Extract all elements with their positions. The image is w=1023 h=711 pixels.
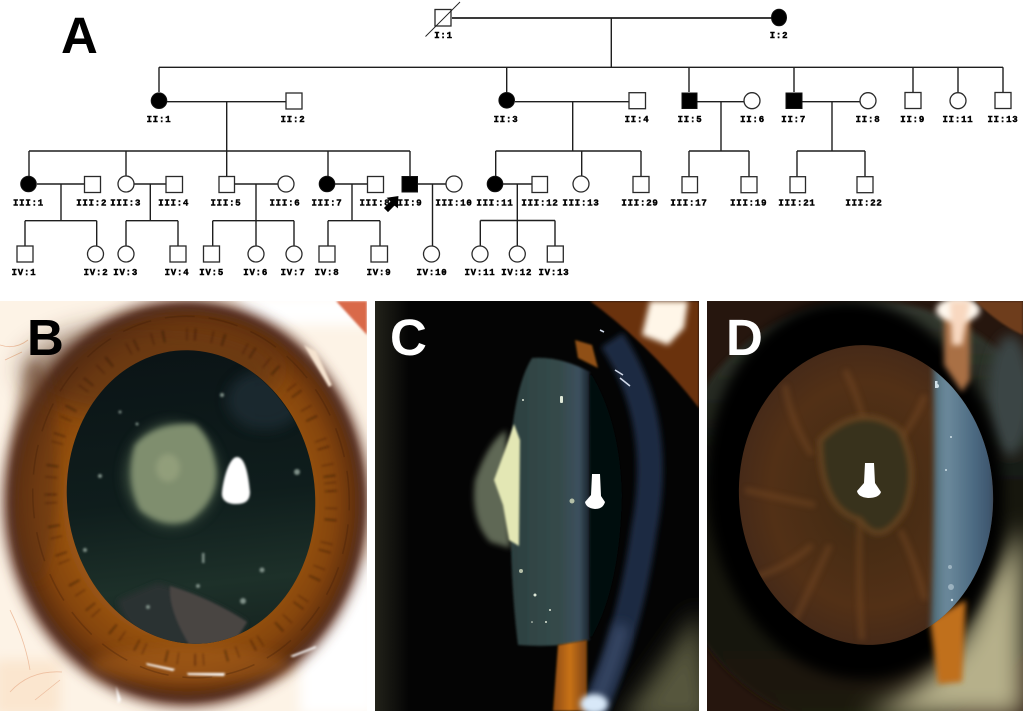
lens disc <box>729 337 1003 653</box>
panel: eye photograph B <box>0 295 375 711</box>
upper right lens reflection <box>226 372 294 431</box>
white reflections on the sclera <box>0 295 375 711</box>
individual I:2 affected <box>770 9 788 41</box>
sclera blood vessels <box>0 340 62 700</box>
individual II:4: II:4 <box>625 115 649 125</box>
beam specks <box>935 381 954 601</box>
individual III:17 <box>670 177 708 208</box>
iris lower warm tone <box>90 647 290 683</box>
individual IV:8 <box>315 246 339 278</box>
upper orange iris reflection <box>575 340 598 368</box>
individual II:5 affected: II:5 <box>678 115 702 125</box>
individual III:8 <box>359 176 391 208</box>
dark gap behind beam <box>590 372 622 640</box>
pupil <box>66 350 316 644</box>
individual IV:3: IV:3 <box>113 268 138 278</box>
iris radial streaks <box>44 328 337 666</box>
bright lens opacity <box>494 424 520 546</box>
lower orange iris reflection <box>553 640 587 711</box>
retroillumination spokes <box>745 370 925 640</box>
individual III:12: III:12 <box>521 198 559 208</box>
corneal highlight <box>585 474 605 509</box>
individual III:5 <box>210 176 242 208</box>
individual IV:13: IV:13 <box>538 268 570 278</box>
individual IV:7 <box>281 246 305 278</box>
individual I:1 deceased: I:1 <box>434 31 453 41</box>
individual IV:7: IV:7 <box>281 268 305 278</box>
dark background <box>409 301 699 711</box>
individual III:10: III:10 <box>435 198 473 208</box>
individual IV:3 <box>113 246 138 278</box>
blue corneal arc <box>594 340 650 711</box>
individual IV:11: IV:11 <box>464 268 496 278</box>
individual III:9 affected proband <box>391 176 423 208</box>
individual II:11: II:11 <box>942 115 974 125</box>
individual III:11 affected <box>476 176 514 208</box>
individual II:3 affected <box>494 92 518 125</box>
individual III:10 <box>435 176 473 208</box>
individual IV:2 <box>84 246 108 278</box>
individual IV:9: IV:9 <box>367 268 391 278</box>
individual II:1 affected: II:1 <box>147 115 171 125</box>
white flecks <box>83 393 300 609</box>
individual IV:1 <box>12 246 36 278</box>
individual III:11 affected: III:11 <box>476 198 514 208</box>
individual IV:1: IV:1 <box>12 268 36 278</box>
individual III:4: III:4 <box>158 198 189 208</box>
individual II:7 affected: II:7 <box>781 115 806 125</box>
individual II:8: II:8 <box>856 115 880 125</box>
individual IV:12 <box>501 246 532 278</box>
panel letter C: C <box>390 309 427 366</box>
individual III:4 <box>158 176 189 208</box>
individual II:6: II:6 <box>740 115 765 125</box>
lower blue flare <box>580 694 608 711</box>
grey limbal ring <box>664 301 1023 711</box>
individual III:9 affected proband: III:9 <box>391 198 423 208</box>
iris <box>10 305 364 701</box>
iris specular reflections <box>116 345 332 704</box>
individual II:13 <box>987 92 1019 125</box>
individual IV:10 <box>416 246 448 278</box>
individual III:2: III:2 <box>76 198 107 208</box>
individual II:6 <box>740 93 765 125</box>
iris left shadow <box>13 360 57 580</box>
individual III:29 <box>621 176 659 208</box>
sclera corner: eyelid <box>336 301 367 335</box>
central ring <box>820 417 911 533</box>
individual II:9 <box>900 92 925 125</box>
individual II:7 affected <box>781 93 806 125</box>
individual III:6 <box>269 176 301 208</box>
upper right grey tone <box>988 335 1023 455</box>
dark brown corner background <box>707 301 1023 711</box>
lens slit beam <box>510 358 591 646</box>
pedigree connector lines <box>25 18 1003 246</box>
individual II:8 <box>856 93 880 125</box>
opacity core <box>156 454 180 482</box>
individual IV:4 <box>165 246 189 278</box>
corneal highlight <box>857 463 881 498</box>
individual II:3 affected: II:3 <box>494 115 518 125</box>
arrow: proband indicator <box>384 196 398 212</box>
individual III:1 affected: III:1 <box>13 198 44 208</box>
generation II <box>147 92 1019 125</box>
individual II:4 <box>625 93 649 125</box>
individual III:19 <box>730 177 767 208</box>
eyelid top right <box>975 301 1023 335</box>
individual IV:2: IV:2 <box>84 268 108 278</box>
individual III:7 affected: III:7 <box>311 198 343 208</box>
individual II:9: II:9 <box>900 115 925 125</box>
individual III:7 affected <box>311 176 343 208</box>
individual IV:11 <box>464 246 496 278</box>
individual IV:13 <box>538 246 570 278</box>
central lens opacity <box>131 424 216 523</box>
beam flare at limbus <box>936 298 980 322</box>
individual III:13 <box>562 176 600 208</box>
individual IV:9 <box>367 246 391 278</box>
central lens opacity halo <box>125 423 219 527</box>
sclera background <box>0 301 367 711</box>
individual II:5 affected <box>678 93 702 125</box>
individual III:2 <box>76 176 107 208</box>
individual IV:10: IV:10 <box>416 268 448 278</box>
generation III <box>13 176 883 208</box>
individual III:13: III:13 <box>562 198 600 208</box>
individual IV:8: IV:8 <box>315 268 339 278</box>
lower right pale sclera <box>860 525 1023 711</box>
individual III:29: III:29 <box>621 198 659 208</box>
eyelid light reflection <box>642 301 688 345</box>
individual III:8: III:8 <box>359 198 391 208</box>
iris halo <box>3 299 369 707</box>
individual III:22: III:22 <box>845 198 883 208</box>
pupil contents <box>83 370 303 646</box>
individual II:2 <box>281 93 305 125</box>
individual IV:5: IV:5 <box>199 268 224 278</box>
individual II:13: II:13 <box>987 115 1019 125</box>
individual III:17: III:17 <box>670 198 708 208</box>
generation I <box>426 2 788 41</box>
panel letter D: D <box>726 309 763 366</box>
individual III:22 <box>845 177 883 208</box>
dim left periphery <box>375 301 400 711</box>
individual IV:12: IV:12 <box>501 268 532 278</box>
lens opacity halo <box>474 430 510 548</box>
individual III:21: III:21 <box>778 198 816 208</box>
lower blue arc highlight <box>592 625 622 711</box>
individual II:2: II:2 <box>281 115 305 125</box>
individual II:1 affected <box>147 93 171 125</box>
white flecks <box>519 330 630 623</box>
individual III:19: III:19 <box>730 198 767 208</box>
individual III:21 <box>778 177 816 208</box>
panel: pedigree A <box>12 2 1019 278</box>
individual I:1 deceased <box>426 2 460 41</box>
pigmented crescent <box>120 584 234 644</box>
lower orange beam <box>930 600 966 684</box>
corneal highlight <box>222 457 250 504</box>
individual I:2 affected: I:2 <box>770 31 788 41</box>
individual III:6: III:6 <box>269 198 301 208</box>
generation IV <box>12 246 570 278</box>
individual III:3 <box>110 176 141 208</box>
individual III:5: III:5 <box>210 198 242 208</box>
lower right sclera <box>614 608 699 711</box>
heading: panel letter A: A <box>61 7 98 64</box>
upper beam on iris <box>944 305 970 392</box>
black iris ring <box>688 286 1022 694</box>
individual IV:6 <box>243 246 268 278</box>
upper right eyelid <box>590 301 699 408</box>
individual II:11 <box>942 93 974 125</box>
slit beam on lens <box>930 345 995 650</box>
individual III:12 <box>521 176 559 208</box>
individual III:1 affected <box>13 176 44 208</box>
individual III:3: III:3 <box>110 198 141 208</box>
panel letter B: B <box>27 309 64 366</box>
panel: eye photograph C <box>375 301 715 711</box>
panel: eye photograph D <box>664 286 1023 711</box>
iris upper shadow <box>20 322 280 418</box>
individual IV:6: IV:6 <box>243 268 268 278</box>
individual IV:4: IV:4 <box>165 268 189 278</box>
lens disc contents <box>745 345 995 650</box>
individual IV:5 <box>199 246 224 278</box>
